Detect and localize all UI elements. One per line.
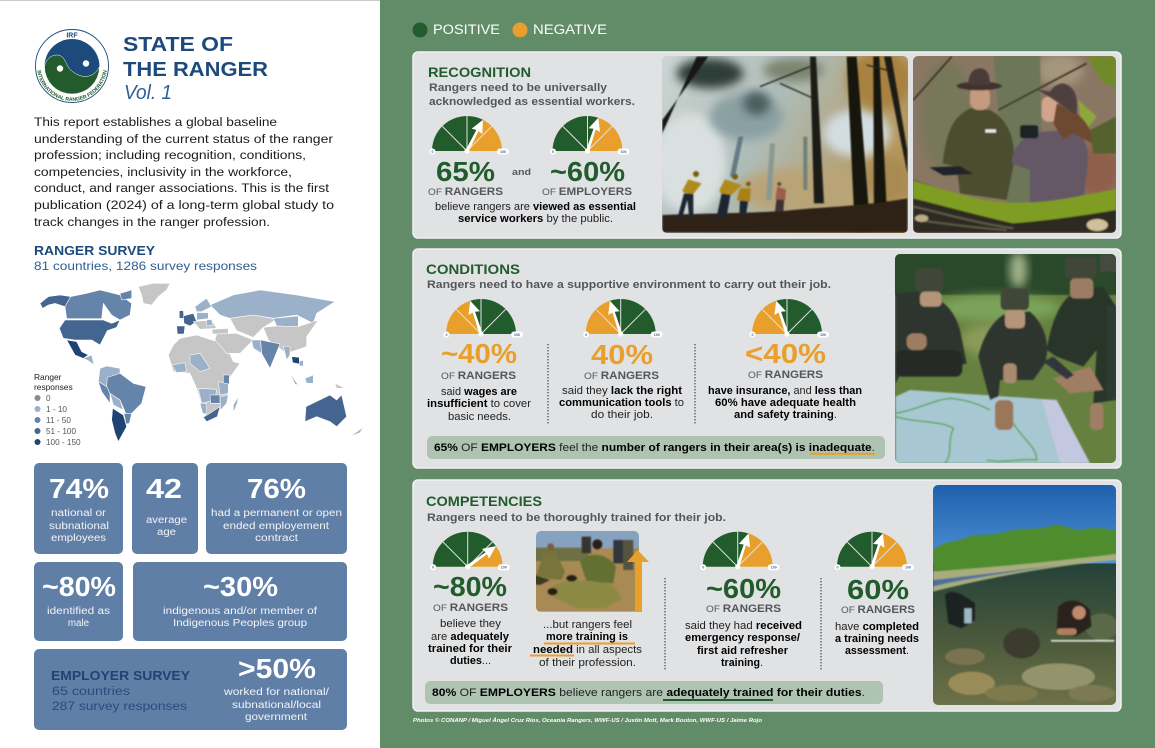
text: more training needed: ...but rangers feel xyxy=(543,619,632,631)
stat card: ~80%: identified as xyxy=(47,606,110,617)
photo: two rangers with moss log xyxy=(912,53,1120,235)
intro text block: conduct, and ranger associations. This is the first xyxy=(34,181,330,195)
intro text block xyxy=(34,115,334,229)
world map xyxy=(40,283,363,442)
stat card: ~80% xyxy=(34,562,123,641)
intro text block: publication (2024) of a long-term global study to xyxy=(34,198,334,212)
stat card: 74%: subnational xyxy=(49,521,109,532)
stat: under 40% insurance: 60% have adequate health xyxy=(715,397,856,409)
intro text block: track changes in the ranger profession. xyxy=(34,215,270,229)
stat card: employer survey xyxy=(34,649,347,730)
gauge: 40% communication tools: 0 xyxy=(585,333,587,337)
stat: 80% rangers: duties... xyxy=(450,655,491,667)
heading: ranger survey xyxy=(34,243,257,273)
gauge: 60% emergency training: 100 xyxy=(771,566,777,570)
stat: 60% needs assessment: a training needs xyxy=(835,633,919,645)
competencies subtitle: Rangers need to be thoroughly trained for their job. xyxy=(427,512,726,524)
stat: 60% of employers xyxy=(542,156,632,198)
stat: 40% wages: OF RANGERS xyxy=(441,370,516,382)
gauge: 60% emergency training xyxy=(700,532,780,570)
gauge: 80% rangers: 0 xyxy=(432,566,434,570)
title: Vol. 1 xyxy=(124,82,172,104)
stat: 80% rangers: trained for their xyxy=(428,643,512,655)
stat card: 74%: national or xyxy=(51,508,107,519)
text: more training needed: more training is xyxy=(546,631,628,643)
gauge: 60% employers: 100 xyxy=(620,150,626,154)
stat: 80% rangers: OF RANGERS xyxy=(433,602,508,614)
map legend: 11 - 50 xyxy=(46,416,71,425)
photo: rangers training xyxy=(535,530,640,612)
recognition caption xyxy=(435,201,636,225)
stat: 40% communication tools: do their job. xyxy=(591,409,653,421)
legend: positive / negative: NEGATIVE xyxy=(533,22,607,37)
gauge: under 40% insurance: 100 xyxy=(820,333,826,337)
stat card: employer survey: government xyxy=(245,712,307,723)
stat card: 76%: had a permanent or open xyxy=(211,508,342,519)
stat: 40% wages: said wages are xyxy=(441,386,517,398)
stat: 80% rangers: are adequately xyxy=(431,631,509,643)
heading: ranger survey: 81 countries, 1286 survey responses xyxy=(34,260,257,273)
stat: 60% needs assessment: have completed xyxy=(835,621,919,633)
background: green page xyxy=(380,0,1155,748)
conditions heading: CONDITIONS xyxy=(426,261,520,277)
stat card: ~30%: Indigenous Peoples group xyxy=(173,618,308,629)
legend: positive / negative xyxy=(412,22,607,38)
stat: 65% of rangers: 65% xyxy=(436,156,495,187)
title: THE RANGER xyxy=(123,58,268,81)
logo: International Ranger Federation: IRF xyxy=(66,32,78,40)
stat card: 76%: ended employement xyxy=(223,521,329,532)
stat: 60% emergency training xyxy=(685,573,802,669)
gauge: 65% rangers xyxy=(430,116,509,154)
stat card: 42: average xyxy=(146,515,188,526)
recognition subtitle xyxy=(429,82,635,108)
stat: 60% emergency training: emergency response/ xyxy=(685,632,800,644)
stat card: 74%: 74% xyxy=(49,473,109,504)
stat: 40% wages xyxy=(427,338,531,423)
gauge: 40% communication tools: 100 xyxy=(654,333,660,337)
panel: conditions xyxy=(413,249,1121,468)
arrow: more training needed xyxy=(627,550,649,612)
panel: competencies xyxy=(413,480,1121,711)
stat card: employer survey: EMPLOYER SURVEY xyxy=(51,668,191,683)
stat card: 74% xyxy=(34,463,123,554)
logo: International Ranger Federation xyxy=(35,29,109,103)
gauge: 40% wages: 0 xyxy=(446,333,448,337)
title xyxy=(123,33,268,104)
map legend: 0 xyxy=(46,394,51,403)
intro text block: understanding of the current status of the ranger xyxy=(34,132,333,146)
panel: recognition xyxy=(413,52,1121,238)
stat: 40% communication tools xyxy=(559,339,684,421)
map legend: Ranger xyxy=(34,372,62,382)
stat: under 40% insurance: and safety training . xyxy=(734,409,837,421)
stat: under 40% insurance xyxy=(708,338,862,421)
map legend: 1 - 10 xyxy=(46,405,67,414)
gauge: 40% communication tools xyxy=(583,299,663,338)
stat card: ~80%: male xyxy=(68,618,90,629)
callout: employers inadequate: 65% OF EMPLOYERS feel the number of rangers in their area(s) is inadequate . xyxy=(434,442,875,454)
stat: 80% rangers: ~80% xyxy=(433,571,507,602)
recognition subtitle: Rangers need to be universally xyxy=(429,82,607,94)
connector word: and: and xyxy=(512,167,531,178)
gauge: 60% emergency training: 0 xyxy=(702,566,704,570)
stat card: employer survey: subnational/local xyxy=(232,700,321,711)
gauge: 60% needs assessment: 100 xyxy=(905,566,911,570)
stat card: 76%: 76% xyxy=(247,473,306,504)
competencies heading: COMPETENCIES xyxy=(426,493,542,509)
gauge: 40% wages: 100 xyxy=(514,333,520,337)
gauge: 60% employers: 0 xyxy=(552,150,554,154)
stat: 65% of rangers xyxy=(428,156,503,198)
photo: divers under mangroves xyxy=(932,483,1118,705)
stat: 40% wages: basic needs. xyxy=(448,411,511,423)
gauge: 60% needs assessment: 0 xyxy=(836,566,838,570)
photo credits: Photos © CONANP / Miguel Ángel Cruz Ríos, Oceania Rangers, WWF-US / Justin Mott, Mark Booton, WWF-US / Jaime Rojo xyxy=(413,717,763,724)
stat: 65% of rangers: OF RANGERS xyxy=(428,186,503,198)
stat card: employer survey: 287 survey responses xyxy=(52,701,187,713)
stat: 60% emergency training: ~60% xyxy=(706,573,781,604)
stat: 80% rangers xyxy=(428,571,512,667)
stat card: 42 xyxy=(132,463,198,554)
stat: 60% needs assessment xyxy=(835,574,919,657)
gauge: 40% wages xyxy=(444,299,523,338)
text: more training needed xyxy=(530,619,642,669)
callout: employers adequately trained xyxy=(425,681,883,704)
stat: 40% wages: ~40% xyxy=(441,338,517,369)
stat card: 76%: contract xyxy=(255,533,298,544)
stat: 40% communication tools: communication tools to xyxy=(559,397,684,409)
stat: 60% of employers: OF EMPLOYERS xyxy=(542,186,632,198)
stat card: ~30%: indigenous and/or member of xyxy=(163,606,317,617)
stat: 80% rangers: believe they xyxy=(440,618,502,630)
text: more training needed: needed in all aspects xyxy=(533,644,642,656)
stat card: 74%: employees xyxy=(51,533,106,544)
callout: employers adequately trained: 80% OF EMPLOYERS believe rangers are adequately trained for their duties . xyxy=(432,687,865,699)
recognition caption: believe rangers are viewed as essential xyxy=(435,201,636,213)
stat: 60% emergency training: training. xyxy=(721,657,763,669)
stat: under 40% insurance: OF RANGERS xyxy=(748,369,823,381)
stat: 60% emergency training: said they had received xyxy=(685,620,802,632)
stat: 60% emergency training: OF RANGERS xyxy=(706,603,781,615)
map legend xyxy=(34,372,81,447)
intro text block: competencies, inclusivity in the workforce, xyxy=(34,165,292,179)
intro text block: profession; including recognition, conditions, xyxy=(34,148,306,162)
stat card: 42: 42 xyxy=(146,473,182,504)
gauge: 60% needs assessment xyxy=(834,532,914,570)
stat: 40% communication tools: 40% xyxy=(591,339,653,370)
heading: ranger survey: RANGER SURVEY xyxy=(34,243,155,258)
stat card: employer survey: worked for national/ xyxy=(223,687,329,698)
stat card: 42: age xyxy=(157,527,177,538)
stat card: employer survey: >50% xyxy=(238,653,316,684)
gauge: 80% rangers xyxy=(430,532,510,572)
map legend: 51 - 100 xyxy=(46,427,76,436)
stat: 60% needs assessment: assessment. xyxy=(845,645,909,657)
stat: 60% needs assessment: OF RANGERS xyxy=(841,604,915,616)
photo: rangers reading a map xyxy=(893,252,1120,467)
stat card: ~30% xyxy=(133,562,347,641)
map legend: 100 - 150 xyxy=(46,438,81,447)
left column: white panel xyxy=(0,0,380,748)
recognition subtitle: acknowledged as essential workers. xyxy=(429,96,635,108)
stat: 60% of employers: ~60% xyxy=(550,156,625,187)
stat card: 76% xyxy=(206,463,347,554)
legend: positive / negative: POSITIVE xyxy=(433,22,500,37)
callout: employers inadequate xyxy=(427,436,885,459)
gauge: under 40% insurance: 0 xyxy=(752,333,754,337)
map legend: responses xyxy=(34,382,73,392)
gauge: under 40% insurance xyxy=(750,299,829,338)
stat: 40% wages: insufficient to cover xyxy=(427,398,531,410)
photo: firefighters in smoky forest xyxy=(662,56,908,233)
stat: 40% communication tools: OF RANGERS xyxy=(584,370,659,382)
recognition caption: service workers by the public. xyxy=(458,213,613,225)
gauge: 80% rangers: 100 xyxy=(501,566,507,570)
gauge: 60% employers xyxy=(550,116,630,154)
stat: 60% emergency training: first aid refresher xyxy=(697,645,788,657)
gauge: 65% rangers: 0 xyxy=(432,150,434,154)
text: more training needed: of their profession. xyxy=(539,657,636,669)
stat: 40% communication tools: said they lack the right xyxy=(562,385,683,397)
intro text block: This report establishes a global baseline xyxy=(34,115,277,129)
gauge: 65% rangers: 100 xyxy=(500,150,506,154)
conditions subtitle: Rangers need to have a supportive environment to carry out their job. xyxy=(427,279,831,291)
stat card: ~30%: ~30% xyxy=(203,571,278,602)
stat: under 40% insurance: have insurance, and less than xyxy=(708,385,862,397)
recognition heading: RECOGNITION xyxy=(428,64,531,80)
stat card: employer survey: 65 countries xyxy=(52,686,130,698)
stat card: ~80%: ~80% xyxy=(42,571,116,602)
logo: International Ranger Federation: INTERNATIONAL RANGER FEDERATION xyxy=(37,70,107,101)
stat: under 40% insurance: <40% xyxy=(745,338,826,369)
stat: 60% needs assessment: 60% xyxy=(847,574,909,605)
title: STATE OF xyxy=(123,33,233,56)
